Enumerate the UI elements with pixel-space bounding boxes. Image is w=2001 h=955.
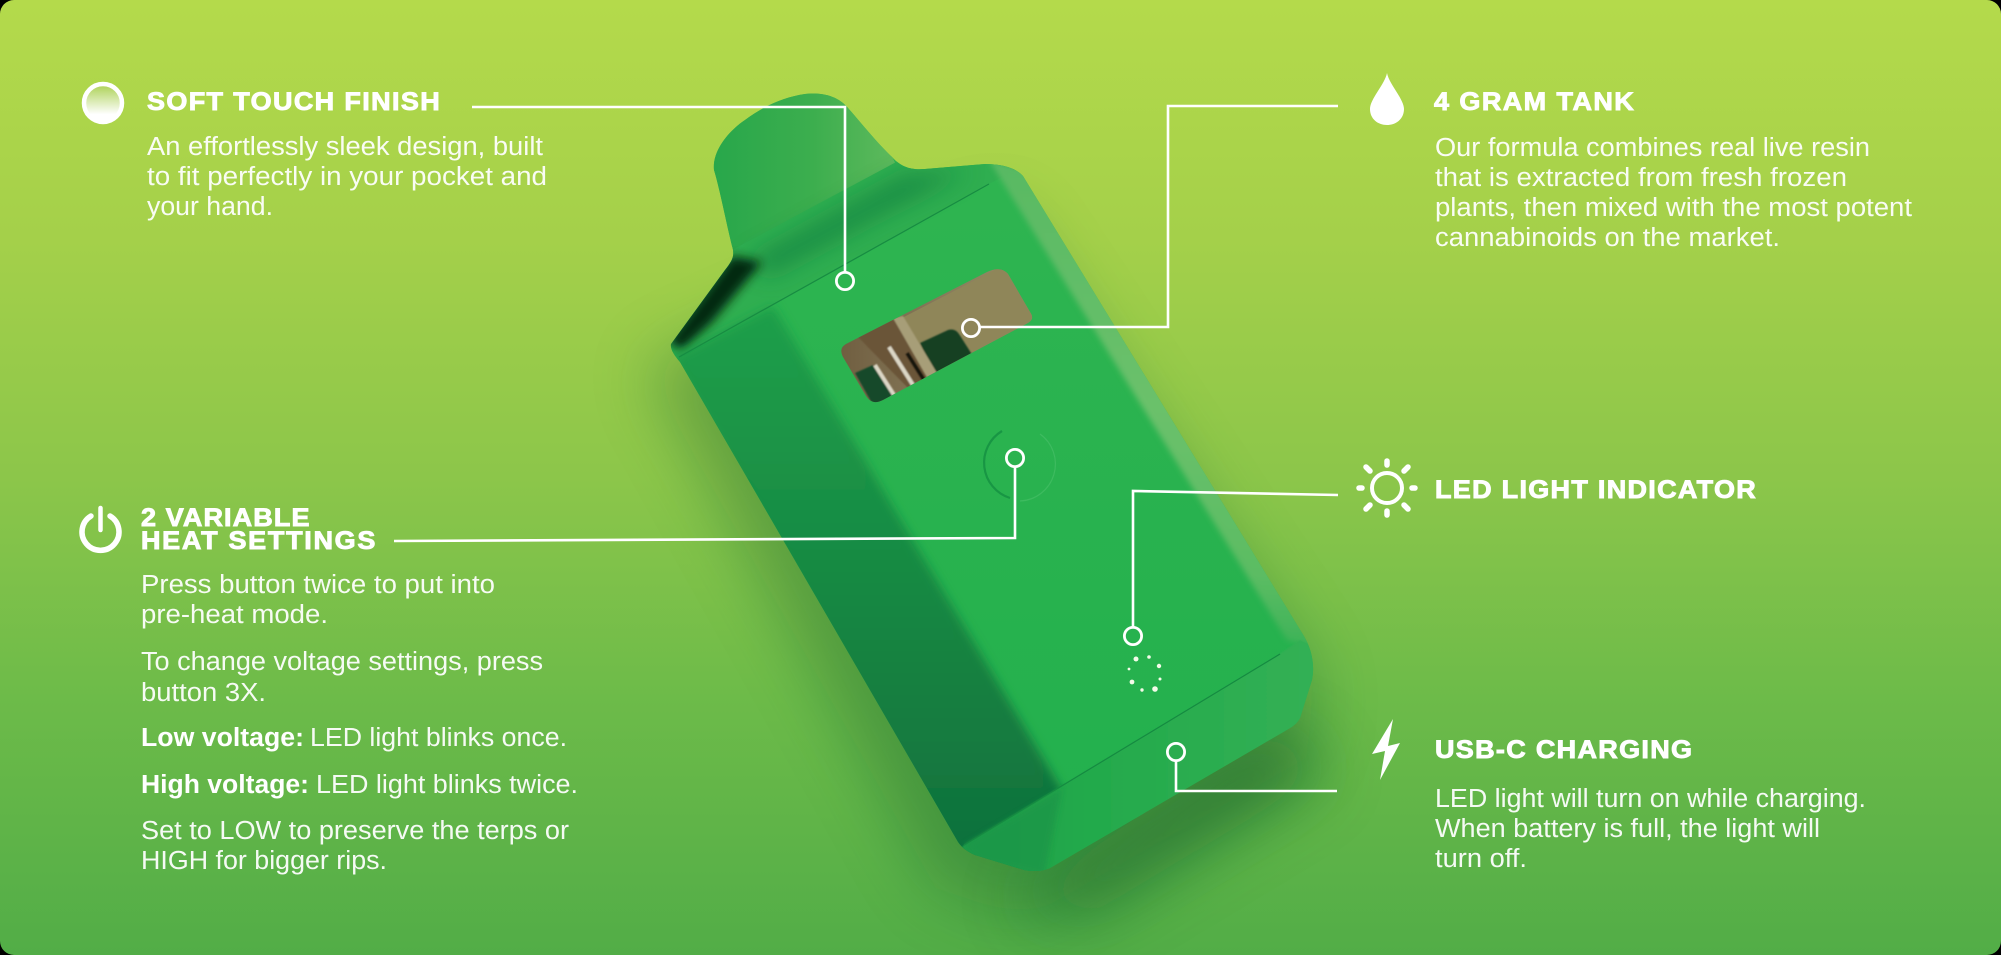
heading: 4 gram tank: 4 GRAM TANK — [1434, 87, 1634, 116]
body: USB-C charging: turn off. — [1435, 845, 1527, 873]
LED indicator dots — [1128, 655, 1162, 692]
dark green pane left — [855, 365, 893, 405]
bottom cap — [950, 640, 1320, 880]
body: USB-C charging: When battery is full, the light will — [1435, 815, 1820, 843]
metal contacts — [875, 347, 913, 398]
right light strip — [989, 160, 1325, 650]
tan column — [893, 316, 937, 379]
leader line: LED light indicator — [1124, 491, 1338, 645]
body: USB-C charging: LED light will turn on while charging. — [1435, 785, 1866, 813]
icon: power — [82, 508, 119, 550]
feature: heat settings — [82, 503, 578, 875]
body: heat settings: HIGH for bigger rips. — [141, 847, 387, 875]
body: 4 gram tank — [1435, 134, 1912, 252]
device window — [841, 269, 1032, 402]
heading: heat settings: 2 VARIABLE — [141, 503, 309, 532]
device shadow — [646, 208, 1330, 918]
body: heat settings: LED light blinks once. — [310, 724, 567, 752]
body: soft touch finish: to fit perfectly in your pocket and — [147, 163, 547, 191]
shoulder shade band — [745, 170, 970, 275]
body: heat settings: Press button twice to put into — [141, 571, 495, 599]
feature: soft touch finish — [84, 84, 547, 221]
body: soft touch finish: An effortlessly sleek design, built — [147, 133, 543, 161]
icon: droplet — [1370, 73, 1404, 125]
dark green pane right — [920, 330, 973, 376]
mouthpiece — [714, 94, 895, 280]
body: 4 gram tank: that is extracted from fresh frozen — [1435, 164, 1847, 192]
heading: heat settings: HEAT SETTINGS — [141, 526, 375, 555]
heading: soft touch finish: SOFT TOUCH FINISH — [147, 87, 440, 116]
body: heat settings: Low voltage: — [141, 724, 304, 752]
leader line: soft touch finish — [472, 107, 854, 290]
leader line: 4 gram tank — [962, 106, 1338, 337]
body: soft touch finish — [147, 133, 547, 221]
body: 4 gram tank: plants, then mixed with the most potent — [1435, 194, 1912, 222]
inner brown column — [858, 316, 928, 388]
feature: 4 gram tank — [1370, 73, 1912, 252]
shoulder black shadow — [668, 256, 762, 350]
seams — [679, 184, 989, 357]
device illustration — [660, 85, 1330, 880]
heading: heat settings — [141, 503, 375, 555]
body: heat settings — [141, 571, 578, 875]
icon: soft touch orb — [84, 84, 122, 122]
body: heat settings: pre-heat mode. — [141, 601, 328, 629]
icon: sun — [1359, 461, 1415, 515]
device body base — [660, 85, 1330, 880]
feature: USB-C charging — [1372, 719, 1866, 873]
power button — [984, 431, 1055, 501]
leader line: USB-C charging — [1167, 743, 1337, 791]
tank chamber right — [904, 269, 1032, 372]
body: heat settings: button 3X. — [141, 679, 266, 707]
left dark face — [670, 306, 1063, 880]
body: heat settings: LED light blinks twice. — [316, 771, 578, 799]
body: heat settings: Set to LOW to preserve the terps or — [141, 817, 570, 845]
body: heat settings: To change voltage settings, press — [141, 648, 543, 676]
feature: LED light indicator — [1359, 461, 1756, 515]
body: heat settings: High voltage: — [141, 771, 309, 799]
leader line: heat settings — [394, 449, 1024, 541]
body: USB-C charging — [1435, 785, 1866, 873]
body: soft touch finish: your hand. — [147, 193, 273, 221]
heading: LED light indicator: LED LIGHT INDICATOR — [1435, 475, 1756, 504]
heading: USB-C charging: USB-C CHARGING — [1435, 735, 1692, 764]
body: 4 gram tank: cannabinoids on the market. — [1435, 224, 1780, 252]
icon: lightning bolt — [1372, 719, 1400, 780]
body: 4 gram tank: Our formula combines real live resin — [1435, 134, 1870, 162]
shoulder — [678, 162, 1015, 335]
bottom bevel — [968, 792, 1060, 871]
